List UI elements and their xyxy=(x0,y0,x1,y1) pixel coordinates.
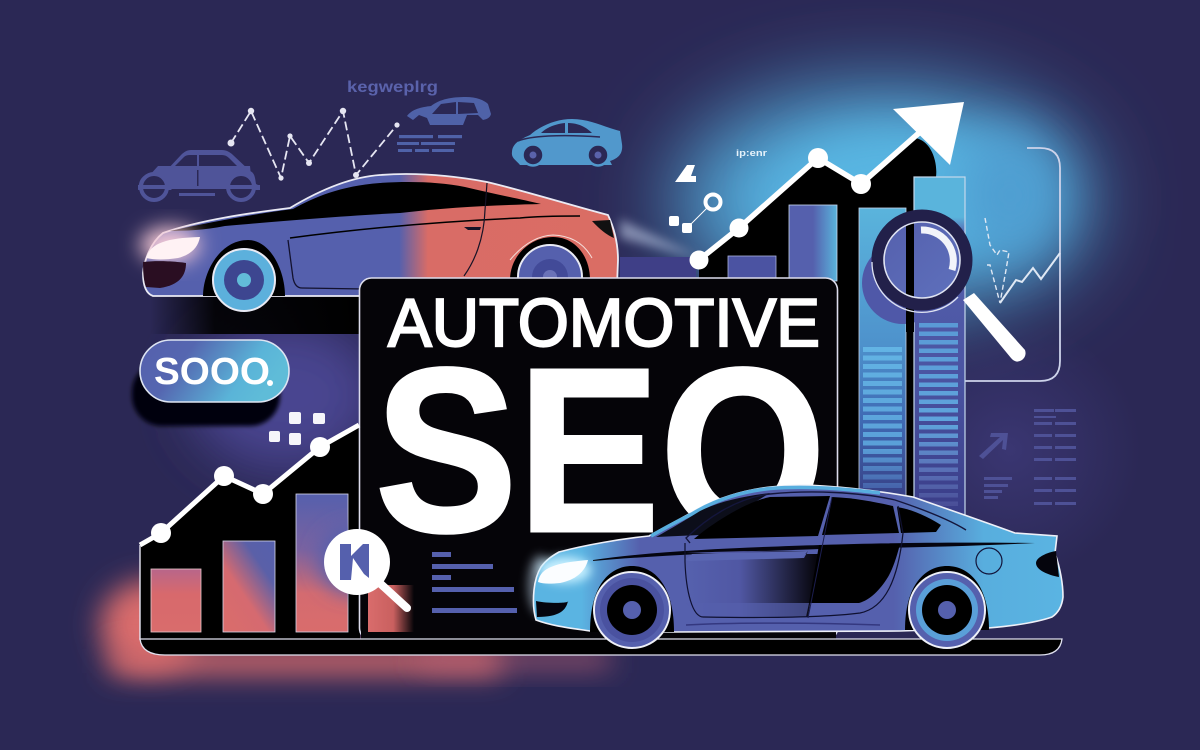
squares xyxy=(269,412,325,445)
tail light xyxy=(592,220,614,238)
bar 3 xyxy=(859,208,906,518)
mid window xyxy=(822,497,899,535)
car: blue sedan xyxy=(528,485,1063,648)
roof highlight xyxy=(651,487,880,536)
magnifier lower left xyxy=(324,529,407,608)
black area under line xyxy=(140,424,360,640)
window strip xyxy=(170,182,541,231)
waist stripe xyxy=(593,543,1035,561)
bar 2 xyxy=(223,541,275,632)
icon: up arrow xyxy=(979,433,1008,459)
lower left trend line xyxy=(140,425,359,545)
front wheel xyxy=(594,572,670,648)
trend line xyxy=(699,132,920,260)
pill: SOOO xyxy=(154,351,270,393)
arrow head xyxy=(893,102,964,165)
shadow under top car xyxy=(150,296,365,334)
bar 4 stripes xyxy=(919,323,958,506)
pill shadow xyxy=(132,362,280,426)
icon: floating nodes xyxy=(669,165,720,233)
bar 3 stripes xyxy=(863,347,902,488)
icon: text lines under small car xyxy=(397,135,462,152)
bar 1 xyxy=(728,256,776,280)
rear window xyxy=(897,507,941,533)
front wheel arch xyxy=(590,566,674,632)
text lines xyxy=(432,552,517,613)
tail light xyxy=(1036,551,1059,577)
rising chart xyxy=(690,102,965,522)
title: automotive: AUTOMOTIVE xyxy=(388,285,820,361)
rear wheel xyxy=(909,572,985,648)
icon: blue car top xyxy=(512,119,622,166)
front door xyxy=(685,551,818,617)
light beam xyxy=(620,219,700,258)
bar 4 lower left xyxy=(368,585,414,632)
front wheel xyxy=(203,240,285,296)
intake xyxy=(536,601,568,617)
infographic canvas xyxy=(80,26,1140,698)
icon: outlined car left xyxy=(138,150,260,200)
title: seo: SEO xyxy=(375,319,826,581)
fuel cap xyxy=(976,548,1002,574)
lower left chart xyxy=(140,428,360,638)
small purple block xyxy=(620,257,696,281)
rear door dark xyxy=(809,544,900,603)
car: top gradient coupe xyxy=(140,174,618,311)
rear wheel xyxy=(510,237,590,280)
panel bottom cover xyxy=(361,600,836,640)
left frame edge xyxy=(139,545,141,640)
floor xyxy=(140,639,1062,655)
character line xyxy=(290,216,580,238)
black area under the line xyxy=(699,138,936,520)
right chart frame xyxy=(965,148,1060,381)
bar 1 xyxy=(151,569,201,632)
icon: small car silhouette top xyxy=(407,97,491,125)
background glows xyxy=(100,90,1140,674)
chart: mini line in frame xyxy=(985,218,1060,303)
headlight xyxy=(539,557,591,583)
pill xyxy=(140,340,289,402)
bar 3 xyxy=(296,494,348,632)
small lines lower right xyxy=(979,409,1076,505)
main black panel xyxy=(360,278,838,640)
front intake xyxy=(143,261,186,288)
label: small text: ip:enr xyxy=(736,148,767,159)
bar 4 xyxy=(914,177,965,522)
bar 2 xyxy=(789,205,837,281)
headlight outer glow xyxy=(528,555,552,615)
door lines xyxy=(288,240,365,289)
trend nodes xyxy=(690,148,871,270)
roof line xyxy=(686,492,966,543)
windshield wedge xyxy=(656,493,770,537)
headlight glow xyxy=(140,227,200,263)
bar 3 magnifier halo xyxy=(308,514,348,608)
door lines xyxy=(685,506,903,618)
label: keyword text: kegweplrg xyxy=(347,79,438,96)
chart: dashed line xyxy=(228,108,400,181)
rear wheel arch xyxy=(905,566,989,630)
front window xyxy=(694,496,830,539)
magnifier right xyxy=(862,216,1026,362)
